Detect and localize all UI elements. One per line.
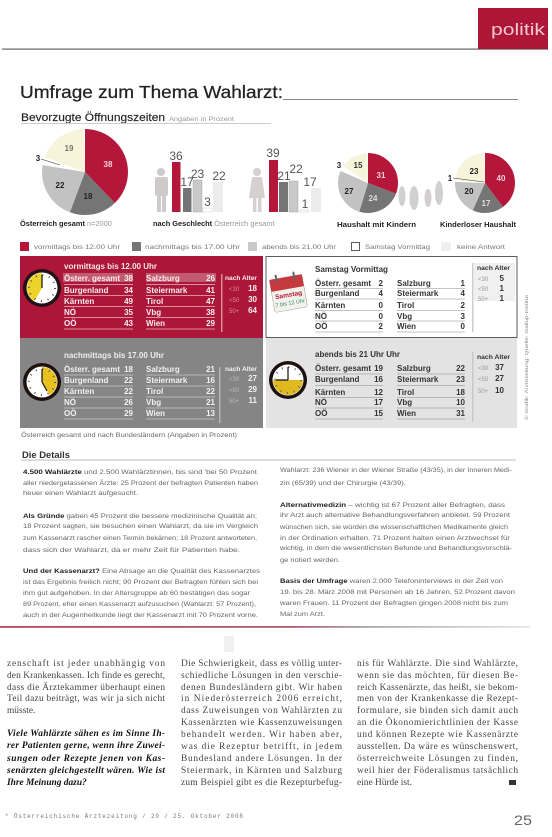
article column 1: müsste. (7, 706, 35, 716)
text block: left column: dass sich der Wahlarzt, da er mehr Zeit für Patienten habe. (23, 547, 240, 554)
text block: right column: Wahlarzt: 236 Wiener in der Wiener Straße (43/35), in der Inneren Medi- (280, 467, 512, 474)
bar chart: men: 17 (180, 175, 194, 189)
table: evening by state: Steiermark (397, 375, 439, 384)
article column 3: reich Kassenärzte, das heißt, sie bekom- (357, 682, 518, 693)
text block: right column: ge notiert werden. (280, 557, 340, 564)
bar chart: women: 39 (266, 146, 280, 160)
table: Saturday by state: 4 (461, 289, 466, 298)
pie chart: Haushalt mit Kindern: 15 (354, 161, 363, 170)
chart note: Österreich gesamt und nach Bundesländern (Angaben in Prozent) (21, 431, 237, 439)
table: afternoon by age (219, 367, 258, 423)
table: morning by state: Salzburg (146, 274, 180, 283)
pie chart: Kinderloser Haushalt: 17 (482, 199, 491, 208)
bar chart: women: 1 (302, 197, 309, 211)
table: morning by age (221, 274, 258, 332)
table: morning by state (63, 273, 216, 329)
table: morning by age: <50 (229, 298, 240, 304)
pie chart: Kinderloser Haushalt: 20 (465, 187, 474, 196)
text block: right column: in der Ordination erhalten. 71 Prozent halten einen Arztwechsel für (280, 535, 511, 542)
article column 3: ausstellen. Da wäre es wünschenswert, (357, 742, 518, 752)
panel: nachmittags bis 17.00 Uhr: nachmittags bis 17.00 Uhr (64, 351, 164, 360)
pie chart: Österreich gesamt: 19 (65, 144, 74, 153)
table: Saturday by state: Steiermark (397, 289, 439, 298)
article column 3 (357, 658, 518, 788)
icon: clock afternoon (23, 363, 61, 401)
table: evening by state (315, 364, 466, 419)
table: morning by state: 49 (124, 297, 134, 306)
table: Saturday by age: 1 (500, 284, 505, 293)
legend: keine Antwort (457, 244, 505, 251)
text block: left column: zum Kassenarzt rascher einen Termin bekämen; 18 Prozent antworteten, (23, 535, 257, 542)
table: Saturday by state: 3 (461, 312, 466, 321)
panel: nachmittags bis 17.00 Uhr (20, 336, 263, 428)
table: morning by state: 38 (124, 274, 134, 283)
article column 2: dass Zuweisungen von Wahlärzten zu (181, 706, 342, 716)
table: evening by state: 12 (374, 388, 384, 397)
article column 3: eine Hürde ist. (357, 778, 412, 788)
article column 2: was die Rezeptur betrifft, in jedem (181, 741, 343, 752)
table: evening by state: 23 (456, 375, 466, 384)
article column 2: Die Schwierigkeit, dass es völlig unter- (181, 659, 342, 669)
table: afternoon by state: 16 (206, 376, 216, 385)
text block: right column: 19. bis 28. März 2008 mit Personen ab 16 Jahren, 52 Prozent davon (280, 589, 516, 596)
table: Saturday by state: 2 (461, 301, 466, 310)
text block: left column: Als Gründe gaben 45 Prozent die bessere medizinische Qualität an; (23, 513, 257, 520)
table: Saturday by state: 0 (379, 301, 384, 310)
article column 1: Teil dazu beiträgt, was wir ja sich nicht (7, 694, 165, 704)
table: morning by state: Tirol (146, 297, 163, 306)
table: Saturday by state: Salzburg (397, 279, 431, 288)
table: afternoon by state: Wien (146, 409, 165, 418)
pie chart: Österreich gesamt: 3 (36, 154, 41, 163)
table: evening by age: <30 (478, 366, 489, 372)
pie chart: Kinderloser Haushalt: 1 (448, 174, 453, 183)
text block: right column: ihr Arzt auch alternative Behandlungsverfahren anbietet. 59 Prozent (280, 512, 510, 519)
bar chart: women: 21 (277, 169, 291, 183)
pie chart: Kinderloser Haushalt: 40 (497, 174, 506, 183)
panel: vormittags bis 12.00 Uhr: vormittags bis 12.00 Uhr (64, 262, 157, 271)
table: afternoon by state: Vbg (146, 398, 161, 407)
article column 2: Bundesland andere Lösungen. In der (181, 754, 343, 764)
article column 2 (181, 659, 343, 788)
text block: right column: zin (65/39) und der Chirurgie (43/39). (280, 480, 406, 487)
table: afternoon by state: 26 (124, 398, 134, 407)
side credit: © Grafik: Ärztezeitung; Quelle: Gallup-Institut (523, 294, 530, 420)
table: Saturday by state: NÖ (315, 312, 327, 321)
panel: abends bis 21 Uhr: abends bis 21 Uhr Uhr (315, 349, 401, 359)
table: Saturday by state: 1 (461, 279, 466, 288)
panel: vormittags bis 12.00 Uhr (20, 256, 263, 336)
article column 3: an die Ökonomierichtlinien der Kasse (357, 716, 518, 728)
table: afternoon by age: 50+ (229, 399, 240, 405)
text block: left column: 4.500 Wahlärzte und 2.500 Wahlärztinnen, bis sind 'bei 50 Prozent (23, 469, 257, 476)
text block: left column: ihm gut aufgehoben. In der Altersgruppe ab 60 bestätigen das sogar (23, 590, 251, 597)
caption: nach Geschlecht: nach Geschlecht Österreich gesamt (153, 219, 275, 228)
pie chart: Österreich gesamt (36, 144, 113, 201)
section tab: politik (478, 8, 548, 49)
icon: woman (249, 168, 265, 212)
table: afternoon by state: Burgenland (64, 376, 109, 385)
icon: man (155, 168, 168, 212)
text block: left column: aller niedergelassenen Ärzte: 25 Prozent der befragten Patienten haben (23, 479, 259, 487)
table: morning by state: 38 (206, 308, 216, 317)
text block: right column: wichtig, in dem die wesentlichsten Befunde und Behandlungsvorschlä- (279, 545, 512, 552)
interview question: Ihre Meinung dazu? (6, 778, 87, 788)
text block: left column: auch in der Augenheilkunde liegt der Kassenarzt mit 70 Prozent vorne. (23, 612, 258, 619)
caption: Österreich gesamt: Österreich gesamt n=2000 (20, 219, 112, 228)
text block: right column: Mal zum Arzt. (280, 611, 325, 618)
table: afternoon by state: Kärnten (64, 387, 94, 396)
table: evening by state: Tirol (397, 388, 414, 397)
caption: Kinderloser Haushalt: Kinderloser Haushalt (440, 220, 517, 229)
title: Umfrage zum Thema Wahlarzt: (20, 82, 283, 102)
subheading: preferred opening hours: Bevorzugte Öffnungszeiten (21, 112, 165, 124)
table: morning by age: 30 (248, 295, 258, 304)
table: morning by state: NÖ (64, 308, 76, 317)
article column 2: zum Beispiel gibt es die Rezepturbefug- (181, 777, 342, 788)
article column 3: weil hier der Föderalismus tatsächlich (357, 766, 518, 776)
table: evening by state: 19 (374, 364, 384, 373)
text block: left column: ist das Ergebnis freilich nicht; 90 Prozent der Befragten fühlen sich bei (23, 579, 258, 586)
table: Saturday by state: Vbg (397, 312, 412, 321)
table: morning by state: Österr. gesamt (64, 274, 120, 283)
table: morning by age: 18 (248, 284, 258, 293)
legend (20, 242, 505, 251)
interview question: Viele Wahlärzte sähen es im Sinne Ih- (7, 729, 165, 739)
article column 1: zenschaft ist jeder unabhängig von (7, 658, 165, 669)
table: evening by state: 18 (456, 388, 466, 397)
table: Saturday by state: Tirol (397, 301, 414, 310)
table: evening by state: 10 (456, 398, 466, 407)
table: Saturday by state: Österr. gesamt (315, 279, 371, 288)
table: Saturday by age: <30 (478, 277, 489, 283)
icon: calendar: 7 bis 12 Uhr (275, 298, 306, 309)
table: afternoon by state: NÖ (64, 398, 76, 407)
table: afternoon by state: Österr. gesamt (64, 365, 120, 374)
icon: clock evening (269, 361, 307, 399)
table: evening by age: nach Alter (477, 355, 511, 361)
text block: right column: waren Frauen. 11 Prozent der Befragten gingen 2008 nicht bis zum (279, 600, 508, 607)
article column 2: Steiermark, in Kärnten und Salzburg (181, 766, 342, 776)
bar chart: men (155, 149, 226, 212)
table: morning by state: Wien (146, 319, 165, 328)
bar chart: men: 22 (212, 169, 226, 183)
interview question: senärzten gleichgestellt wären. Wie ist (6, 766, 165, 776)
article column 2: behandelt werden. Wir haben aber, (181, 730, 342, 740)
table: Saturday by age: nach Alter (477, 266, 511, 272)
legend: nachmittags bis 17.00 Uhr (145, 244, 241, 251)
table: evening by state: 15 (374, 409, 384, 418)
text block: right column: Basis der Umfrage waren 2.000 Telefoninterviews in der Zeit von (280, 578, 504, 585)
bar chart: men: 3 (204, 195, 211, 209)
table: morning by age: <30 (229, 287, 240, 293)
table: afternoon by age: 27 (248, 374, 258, 383)
pie chart: Österreich gesamt: 18 (84, 192, 93, 201)
table: morning by state: 29 (206, 319, 216, 328)
text block: left column: 18 Prozent sagten, sie besuchen einen Wahlarzt, da sie im Vergleich (23, 523, 259, 530)
pie chart: Kinderloser Haushalt (448, 167, 506, 208)
table: evening by state: Salzburg (397, 364, 431, 373)
bar chart: men: 23 (191, 167, 204, 181)
table: Saturday by state: 2 (379, 279, 384, 288)
table: afternoon by state: 22 (124, 387, 134, 396)
table: morning by state: Vbg (146, 308, 161, 317)
pie chart: Haushalt mit Kindern: 31 (377, 171, 386, 180)
table: afternoon by state: 21 (206, 365, 216, 374)
article column 3: men von der Krankenkasse die Rezept- (357, 694, 518, 704)
text block: left column: heuer einen Wahlarzt aufgesucht. (23, 490, 138, 497)
text block: right column: Alternativmedizin – wichtig ist 67 Prozent aller Befragten, dass (280, 502, 505, 509)
table: morning by state: 43 (124, 319, 134, 328)
footer: publication line: * Österreichische Ärztezeitung / 20 / 25. Oktober 2008 (5, 813, 243, 820)
icon: family silhouettes (398, 181, 443, 210)
table: Saturday by age: 5 (500, 274, 505, 283)
table: evening by state: Kärnten (315, 388, 345, 397)
table: Saturday by age: 1 (500, 294, 505, 303)
text block: left column: 89 Prozent, eher einen Kassenarzt aufzusuchen (Wahlarzt: 57 Prozent), (23, 601, 256, 608)
panel: abends bis 21 Uhr (266, 338, 517, 428)
table: evening by age: 27 (495, 374, 505, 383)
table: Saturday by state: 0 (461, 322, 466, 331)
table: afternoon by age: nach Alter (225, 367, 258, 373)
table: evening by age: <50 (478, 377, 489, 383)
text block: left column (23, 469, 260, 619)
table: Saturday by state: 2 (379, 322, 384, 331)
article column 2: in Niederösterreich 2006 erreicht, (181, 694, 342, 704)
bar chart: men: 36 (169, 149, 183, 163)
table: evening by state: Burgenland (315, 375, 360, 384)
subheading: preferred opening hours (21, 112, 271, 124)
article column 1: dass die Ärztekammer überhaupt einen (7, 681, 165, 693)
legend: vormittags bis 12.00 Uhr (34, 244, 121, 251)
panel: Samstag Vormittag: Samstag Vormittag (315, 264, 388, 274)
pie chart: Österreich gesamt: 38 (104, 160, 113, 169)
table: morning by state: Burgenland (64, 286, 109, 295)
page number: 25 (514, 812, 532, 828)
article column 3: und können Rezepte wie Kassenärzte (357, 730, 518, 740)
article column 3: österreichweite Lösungen zu finden, (357, 753, 518, 764)
bar chart: women (249, 146, 321, 212)
table: afternoon by state: 13 (206, 409, 216, 418)
table: evening by state: 22 (456, 364, 466, 373)
article column 2: schiedliche Lösungen in den verschie- (181, 671, 342, 681)
table: Saturday by age: 50+ (478, 297, 489, 303)
table: Saturday by state: Kärnten (315, 301, 345, 310)
table: evening by state: Wien (397, 409, 416, 418)
table: Saturday by state: Burgenland (315, 289, 360, 298)
table: evening by state: 16 (374, 375, 384, 384)
table: morning by age: nach Alter (225, 276, 258, 282)
pie chart: Österreich gesamt: 22 (56, 181, 65, 190)
table: afternoon by state: Steiermark (146, 376, 188, 385)
table: Saturday by state: Wien (397, 322, 416, 331)
table: evening by state: OÖ (315, 409, 327, 418)
bar chart: women: 17 (303, 175, 317, 189)
text block: right column (279, 467, 516, 618)
table: morning by age: 64 (248, 306, 258, 315)
table: Saturday by state: 4 (379, 289, 384, 298)
table: Saturday by state: OÖ (315, 322, 327, 331)
table: morning by state: 35 (124, 308, 134, 317)
section tab: politik: politik (491, 20, 546, 39)
icon: clock morning (23, 269, 61, 307)
pie chart: Haushalt mit Kindern: 24 (369, 194, 378, 203)
interview question (6, 729, 165, 788)
article column 3: formulare, sie binden sich damit auch (357, 705, 518, 716)
table: morning by state: 41 (206, 286, 216, 295)
icon: calendar: Samstag (275, 290, 303, 301)
table: evening by state: 31 (456, 409, 466, 418)
legend: abends bis 21.00 Uhr (262, 244, 337, 251)
table: Saturday by age (472, 263, 515, 332)
table: afternoon by state: Tirol (146, 387, 163, 396)
table: evening by state: Vbg (397, 398, 412, 407)
table: afternoon by state: 18 (124, 365, 134, 374)
table: afternoon by age: 29 (248, 385, 258, 394)
table: afternoon by age: 11 (249, 396, 258, 405)
article column 3: wenn sie das möchten, für diesen Be- (357, 670, 518, 681)
table: afternoon by age: <50 (229, 388, 240, 394)
table: afternoon by state (64, 365, 216, 419)
table: morning by state: Kärnten (64, 297, 94, 306)
text block: left column: Und der Kassenarzt? Eine Absage an die Qualität des Kassenarztes (23, 568, 260, 575)
bar chart: women: 22 (289, 162, 303, 176)
caption: Haushalt mit Kindern: Haushalt mit Kindern (337, 220, 417, 229)
table: evening by age (472, 352, 511, 422)
table: Saturday by state (315, 279, 466, 332)
icon: calendar (269, 270, 308, 313)
pie chart: Haushalt mit Kindern: 27 (345, 187, 354, 196)
table: evening by state: 17 (374, 398, 384, 407)
table: evening by age: 50+ (478, 389, 489, 395)
table: morning by state: 47 (206, 297, 216, 306)
table: morning by state: Steiermark (146, 286, 188, 295)
article column 1 (6, 658, 165, 788)
article column 1: den Krankenkassen. Ich finde es gerecht, (7, 670, 165, 681)
interview question: sungen oder Rezepte jenen von Kas- (6, 754, 165, 764)
panel: Samstag Vormittag (266, 256, 517, 338)
table: afternoon by state: 29 (124, 409, 134, 418)
interview question: rer Patienten gerne, wenn ihre Zuwei- (7, 741, 165, 751)
article column 2: Kassenärzten wie Kassenzuweisungen (181, 718, 342, 728)
table: evening by age: 37 (495, 363, 505, 372)
table: Saturday by state: 0 (379, 312, 384, 321)
article column 2: denen Bundesländern gibt. Wir haben (181, 683, 342, 693)
table: evening by age: 10 (495, 386, 505, 395)
table: evening by state: Österr. gesamt (315, 364, 371, 373)
article column 3: nis für Wahlärzte. Die sind Wahlärzte, (357, 658, 518, 669)
pie chart: Kinderloser Haushalt: 23 (470, 167, 479, 176)
table: morning by state: 26 (206, 274, 216, 283)
table: morning by state: OÖ (64, 319, 76, 328)
table: afternoon by state: 21 (206, 398, 216, 407)
table: afternoon by state: 22 (124, 376, 134, 385)
table: evening by state: NÖ (315, 398, 327, 407)
table: afternoon by state: OÖ (64, 409, 76, 418)
pie chart: Haushalt mit Kindern: 3 (337, 161, 342, 170)
table: Saturday by age: <50 (478, 287, 489, 293)
table: afternoon by state: 22 (206, 387, 216, 396)
text block: right column: wünschen sich, sie würden die wissenschaftlichen Medikamente gleich (279, 524, 508, 531)
table: morning by state: 34 (124, 286, 134, 295)
table: morning by age: 50+ (229, 309, 240, 315)
table: afternoon by age: <30 (229, 377, 240, 383)
legend: Samstag Vormittag (365, 244, 430, 251)
pie chart: Haushalt mit Kindern (337, 161, 386, 203)
subheading: preferred opening hours: Angaben in Prozent (169, 116, 234, 123)
heading: Die Details: Die Details (22, 450, 70, 461)
table: afternoon by state: Salzburg (146, 365, 180, 374)
